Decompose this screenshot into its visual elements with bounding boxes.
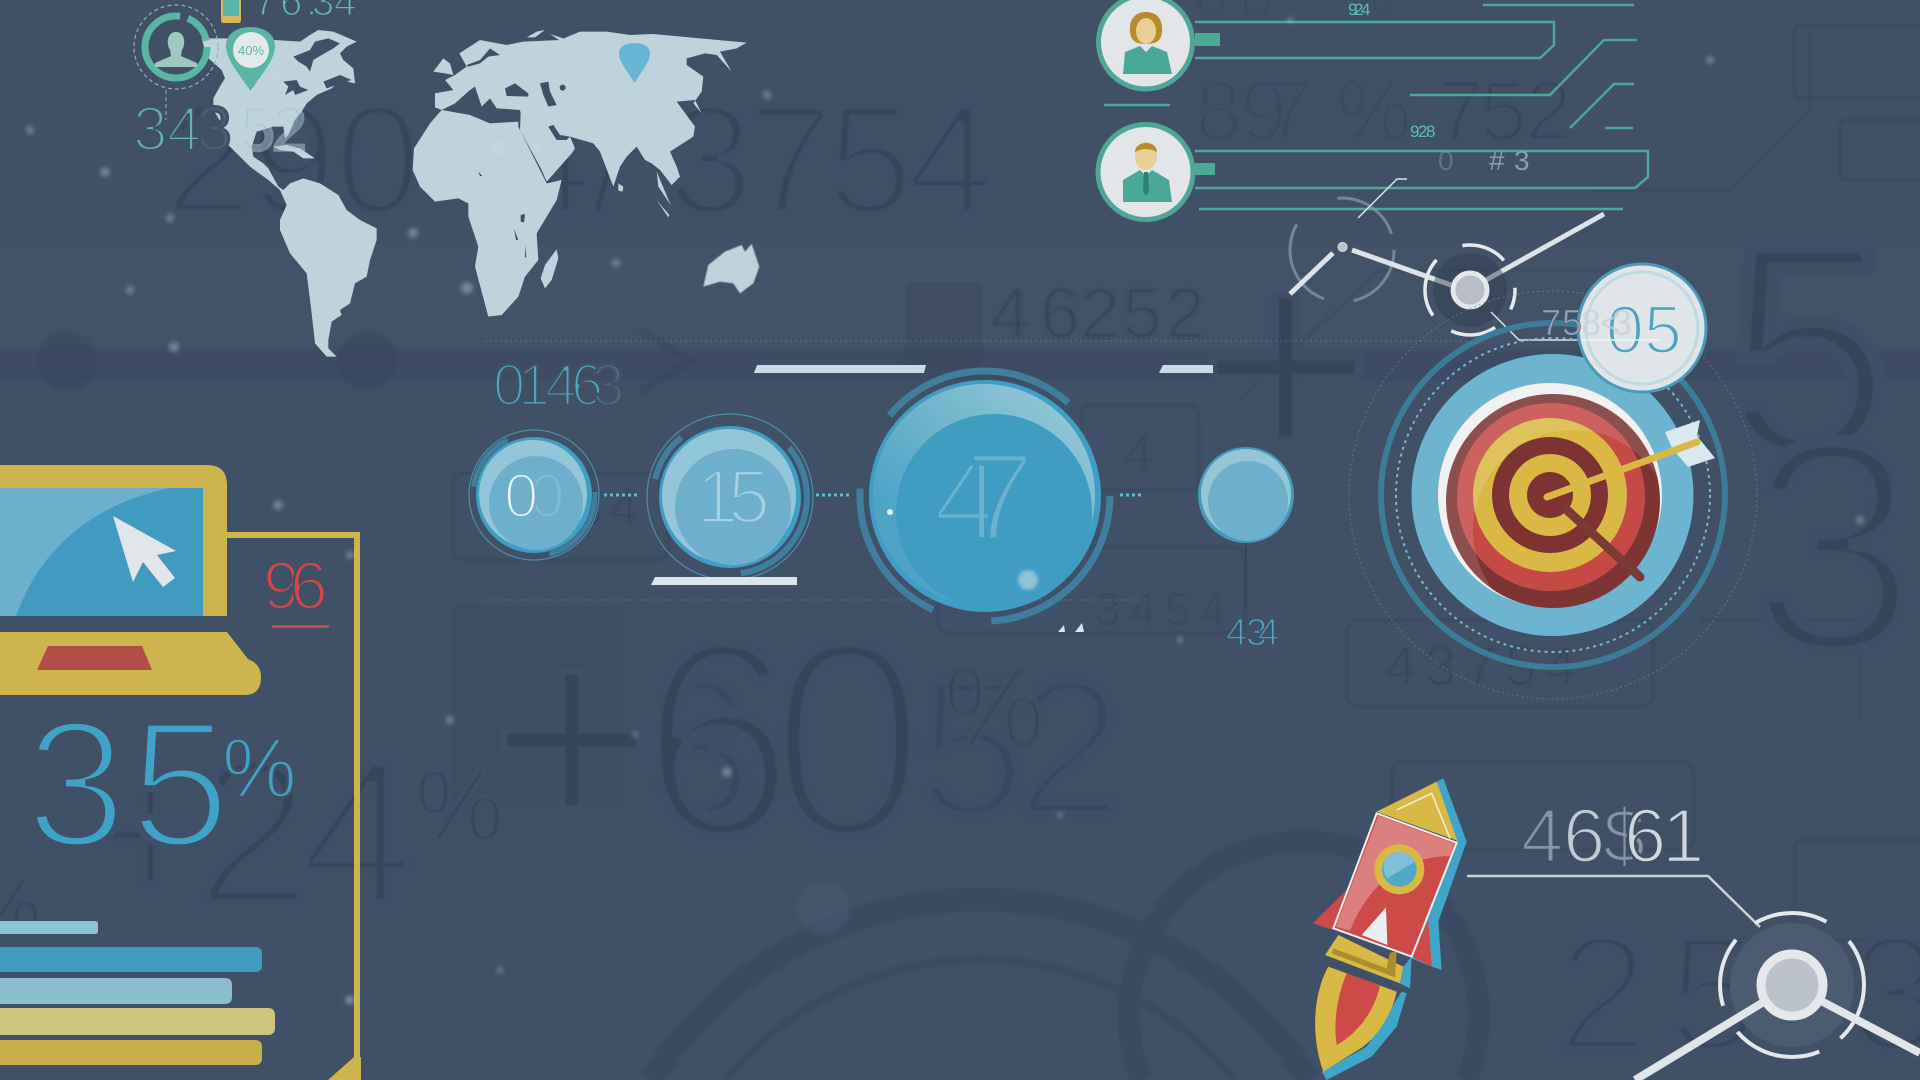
- location pin 40 percent: 40%: [238, 43, 264, 58]
- ghost numbers: 3: [1750, 378, 1917, 714]
- profile codes: [1348, 0, 1435, 141]
- location pin blue: [619, 43, 650, 83]
- icon: man avatar: [1098, 124, 1193, 220]
- rocket fin mark: [1362, 907, 1387, 945]
- world map: [202, 30, 759, 357]
- circle: 47: [860, 371, 1110, 621]
- ghost numbers: 752: [1436, 64, 1572, 159]
- laptop base: [0, 632, 261, 695]
- circle: 0: [469, 430, 599, 560]
- circle: 47: 47: [933, 428, 1035, 567]
- rocket window: [1374, 844, 1424, 894]
- profile rows: [1104, 0, 1648, 209]
- badge 05: 05: [1606, 292, 1682, 368]
- value 46 dollar 61: $: [1603, 794, 1645, 879]
- screen highlight: [0, 488, 170, 616]
- ghost numbers: %: [415, 750, 504, 862]
- rocket nose: [1377, 782, 1457, 841]
- value 96: 96: [263, 548, 328, 624]
- panel frame: [227, 535, 357, 1077]
- rocket: [1313, 778, 1467, 1080]
- ghost numbers: +: [1198, 195, 1373, 531]
- left map value: 52: [240, 95, 306, 164]
- rocket exhaust: [1315, 967, 1397, 1072]
- node label: 8<3: [1581, 302, 1632, 343]
- ghost numbers: +: [490, 581, 654, 893]
- value 46 dollar 61: 6: [1563, 794, 1605, 879]
- target halo rings: [1349, 291, 1757, 699]
- value 46 dollar 61: [1521, 794, 1704, 879]
- profile lines: [1104, 5, 1648, 209]
- ghost numbers: 5: [1725, 181, 1892, 517]
- value 01463: 0146: [493, 353, 603, 418]
- dotted guide lines: [485, 341, 1480, 600]
- ghost numbers: 3: [645, 639, 753, 857]
- target face: [1438, 383, 1662, 608]
- profile codes: 928: [1410, 122, 1435, 141]
- ghost numbers: +24: [90, 717, 415, 948]
- ghost numbers: 7: [1265, 64, 1312, 159]
- profile tabs: [1195, 33, 1220, 175]
- ghost numbers: %: [1336, 64, 1412, 159]
- ghost boxes: [453, 25, 1920, 940]
- ghost numbers: 43754: [1385, 634, 1576, 697]
- value underline: [272, 625, 329, 628]
- connector: [604, 494, 1143, 496]
- value 434: 434: [1226, 612, 1279, 654]
- circle: 0: 0: [504, 462, 538, 531]
- circle: empty: [1198, 447, 1294, 610]
- map: americas: [202, 30, 377, 357]
- icon: woman avatar: [1098, 0, 1192, 89]
- ghost numbers: 52: [918, 639, 1123, 857]
- rocket body: [1333, 813, 1457, 957]
- badge 05: [1578, 264, 1706, 392]
- value 35 percent: 35: [26, 684, 230, 885]
- value 46 dollar 61: 61: [1624, 794, 1704, 879]
- target: [1349, 291, 1757, 699]
- map: old world: [413, 30, 759, 317]
- value 35 percent: %: [222, 721, 297, 815]
- rocket side: [1412, 778, 1467, 970]
- left map value: 34: [133, 95, 201, 164]
- target sheen: [1446, 394, 1657, 589]
- ghost numbers: 4: [1125, 425, 1153, 481]
- node label: 75: [1541, 302, 1582, 343]
- bar chart: [0, 921, 275, 1065]
- laptop lid: [0, 465, 227, 616]
- user ring icon: [134, 5, 218, 120]
- laptop trackpad: [37, 646, 152, 670]
- ghost numbers: %: [943, 644, 1045, 772]
- background bands: [0, 243, 1920, 808]
- ghost arcs: [37, 330, 1479, 1080]
- ghost numbers: 60: [640, 584, 926, 896]
- ghost numbers: 89: [1195, 64, 1287, 159]
- laptop screen: [0, 488, 203, 616]
- node network bottom: [1467, 876, 1920, 1080]
- value 46 dollar 61: 4: [1521, 794, 1563, 879]
- arrow fletching: [1665, 420, 1715, 467]
- circle: 0: 0: [530, 462, 564, 531]
- ghost rank text: #3: [1489, 145, 1530, 176]
- ghost numbers: 2904/3754: [165, 73, 993, 246]
- phone icon: [221, 0, 241, 23]
- arrow shaft: [1547, 442, 1697, 497]
- node label: [1541, 302, 1660, 343]
- location pin 40 percent: [226, 27, 275, 91]
- ghost numbers: 25: [1557, 901, 1760, 1080]
- rocket collar: [1325, 935, 1403, 983]
- left map value: [133, 95, 306, 164]
- circle: 15: 15: [696, 455, 770, 540]
- ghost numbers: 46252: [990, 274, 1205, 354]
- soft ghost dot: [796, 881, 850, 935]
- ghost numbers: 34: [575, 480, 638, 536]
- ghost numbers: 3454: [1095, 583, 1226, 635]
- profile codes: 924: [1348, 0, 1370, 19]
- icon: cursor: [113, 516, 176, 587]
- ghost rank text: 0: [1438, 145, 1454, 176]
- arrow shadow: [1567, 510, 1640, 577]
- node network top: [1290, 179, 1660, 340]
- rocket wings: [1313, 890, 1432, 967]
- highlight bars: [651, 365, 1213, 632]
- ghost rank text: [1438, 145, 1530, 176]
- circle: 15: [647, 414, 813, 580]
- left map value: 3: [197, 95, 231, 164]
- value 01463: 3: [592, 353, 624, 418]
- panel: laptop report: [0, 465, 361, 1080]
